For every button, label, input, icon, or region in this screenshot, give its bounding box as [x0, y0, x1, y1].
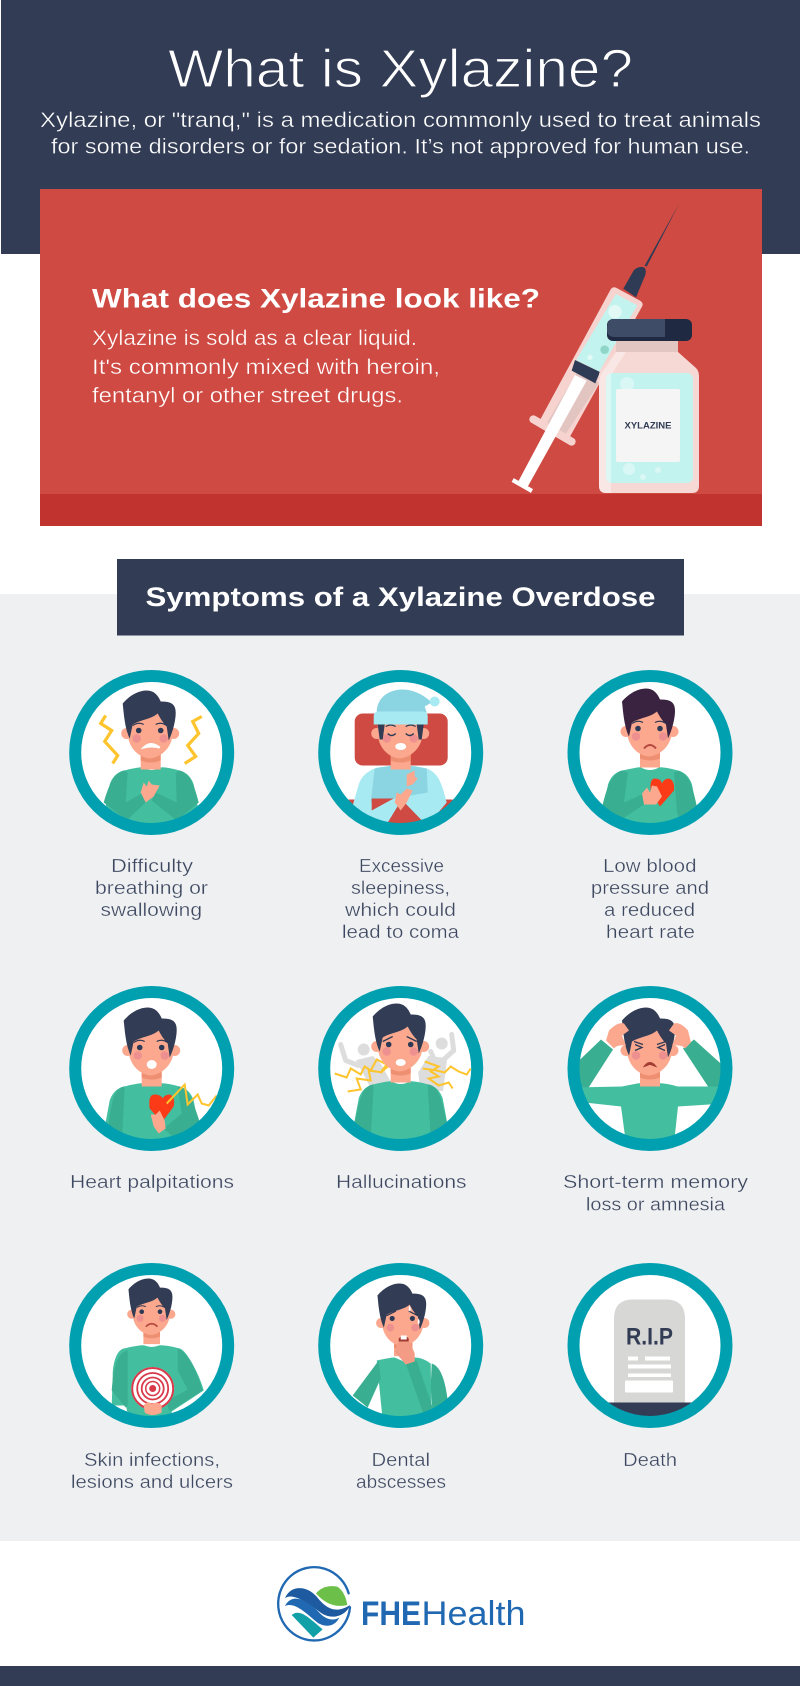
label: low blood pressure: a reduced: [604, 900, 695, 920]
label: excessive sleepiness: lead to coma: [342, 922, 460, 942]
label: dental abscesses: Dental: [372, 1450, 430, 1470]
header background: [1, 0, 800, 254]
label: skin infections: Skin infections,: [84, 1450, 220, 1470]
icon: heart palpitations: [75, 992, 228, 1145]
label: difficulty breathing: breathing or: [95, 878, 208, 898]
label: death: Death: [623, 1450, 677, 1470]
label: short-term memory loss: Short-term memory: [563, 1172, 748, 1192]
heading: symptoms: [117, 559, 684, 636]
panel: symptoms background: [0, 594, 800, 1541]
icon: hallucinations: [324, 992, 477, 1145]
label: heart palpitations: Heart palpitations: [70, 1172, 234, 1192]
icon: difficulty breathing: [75, 676, 228, 829]
icon: vial: [599, 319, 699, 493]
panel: what does xylazine look like: [40, 189, 762, 526]
heading: look like: What does Xylazine look like?: [92, 284, 540, 314]
icon: low blood pressure: [574, 676, 726, 829]
logo: FHE Health: FHE: [361, 1595, 421, 1633]
icon: dental abscesses: [324, 1269, 477, 1422]
icon: logo mark: [278, 1567, 350, 1640]
label: excessive sleepiness: Excessive: [359, 856, 444, 876]
label: skin infections: [71, 1450, 233, 1492]
logo: FHE Health: [278, 1567, 526, 1640]
label: excessive sleepiness: [342, 856, 460, 942]
icon: skin infections: [75, 1269, 228, 1422]
label: skin infections: lesions and ulcers: [71, 1472, 233, 1492]
label: low blood pressure: [591, 856, 709, 942]
heading: symptoms: Symptoms of a Xylazine Overdose: [146, 582, 656, 612]
label: short-term memory loss: [563, 1172, 748, 1214]
label: short-term memory loss: loss or amnesia: [586, 1194, 726, 1214]
label: low blood pressure: pressure and: [591, 878, 709, 898]
label: difficulty breathing: Difficulty: [111, 856, 193, 876]
intro text: for some disorders or for sedation. It’s not approved for human use.: [51, 136, 750, 158]
description text: Xylazine is sold as a clear liquid.: [92, 327, 417, 350]
label: low blood pressure: Low blood: [603, 856, 696, 876]
icon: death tombstone: R.I.P: [626, 1324, 673, 1350]
label: low blood pressure: heart rate: [606, 922, 695, 942]
label: difficulty breathing: [95, 856, 208, 920]
logo: FHE Health: Health: [422, 1595, 526, 1633]
intro text: [40, 109, 761, 158]
icon: short-term memory loss: [574, 992, 726, 1145]
label: dental abscesses: abscesses: [356, 1472, 446, 1492]
label: excessive sleepiness: which could: [344, 900, 456, 920]
label: hallucinations: Hallucinations: [336, 1172, 466, 1192]
icon: excessive sleepiness: [324, 676, 477, 829]
icon: death tombstone: [574, 1269, 726, 1422]
description text: [92, 327, 440, 408]
description text: fentanyl or other street drugs.: [92, 384, 403, 408]
icon: syringe: [513, 203, 679, 491]
footer bar: [0, 1666, 800, 1686]
icon: vial: XYLAZINE: [624, 420, 672, 432]
label: excessive sleepiness: sleepiness,: [351, 878, 450, 898]
intro text: Xylazine, or "tranq," is a medication commonly used to treat animals: [40, 109, 761, 132]
label: difficulty breathing: swallowing: [100, 900, 202, 920]
title: What is Xylazine?: [168, 39, 633, 99]
label: dental abscesses: [356, 1450, 446, 1492]
description text: It's commonly mixed with heroin,: [92, 356, 440, 379]
